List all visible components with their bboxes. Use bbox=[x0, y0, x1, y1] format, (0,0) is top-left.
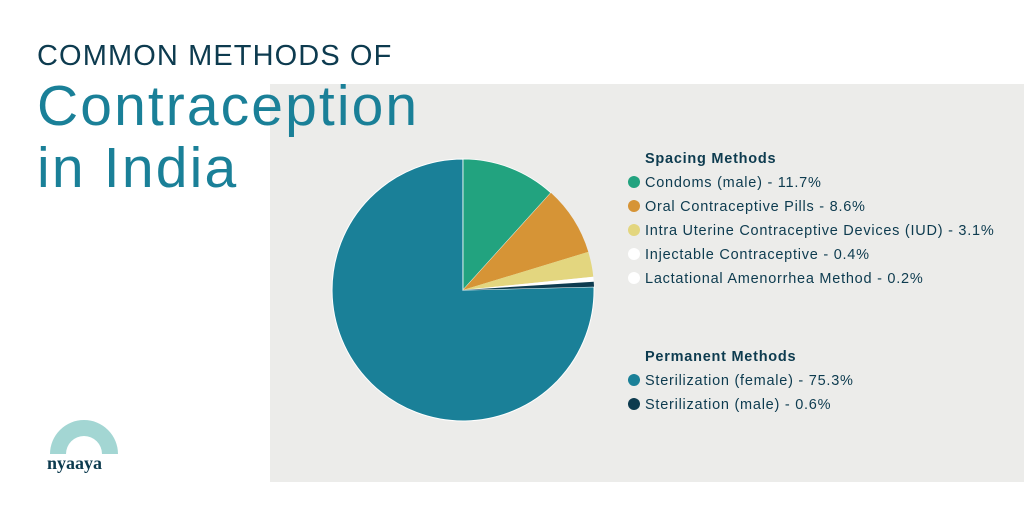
legend: spacing methods: Oral Contraceptive Pills - 8.6% bbox=[645, 199, 866, 215]
title: in India bbox=[37, 136, 238, 200]
title: Contraception bbox=[37, 74, 419, 138]
legend: permanent methods: Permanent Methods bbox=[645, 349, 796, 365]
legend: spacing methods: Lactational Amenorrhea Method - 0.2% bbox=[645, 271, 923, 287]
legend: permanent methods: Sterilization (male) - 0.6% bbox=[645, 397, 831, 413]
legend: spacing methods: Condoms (male) - 11.7% bbox=[645, 175, 822, 191]
title: COMMON METHODS OF bbox=[37, 40, 392, 72]
gray panel bbox=[270, 84, 1024, 482]
legend: spacing methods: Intra Uterine Contraceptive Devices (IUD) - 3.1% bbox=[645, 223, 994, 239]
legend: spacing methods bbox=[628, 151, 994, 287]
legend: permanent methods bbox=[628, 349, 854, 413]
logo: nyaaya: nyaaya bbox=[47, 453, 102, 473]
legend: spacing methods: Spacing Methods bbox=[645, 151, 776, 167]
legend: permanent methods: Sterilization (female) - 75.3% bbox=[645, 373, 854, 389]
title bbox=[37, 40, 419, 200]
legend: spacing methods: Injectable Contraceptive - 0.4% bbox=[645, 247, 870, 263]
logo: nyaaya bbox=[47, 420, 118, 473]
